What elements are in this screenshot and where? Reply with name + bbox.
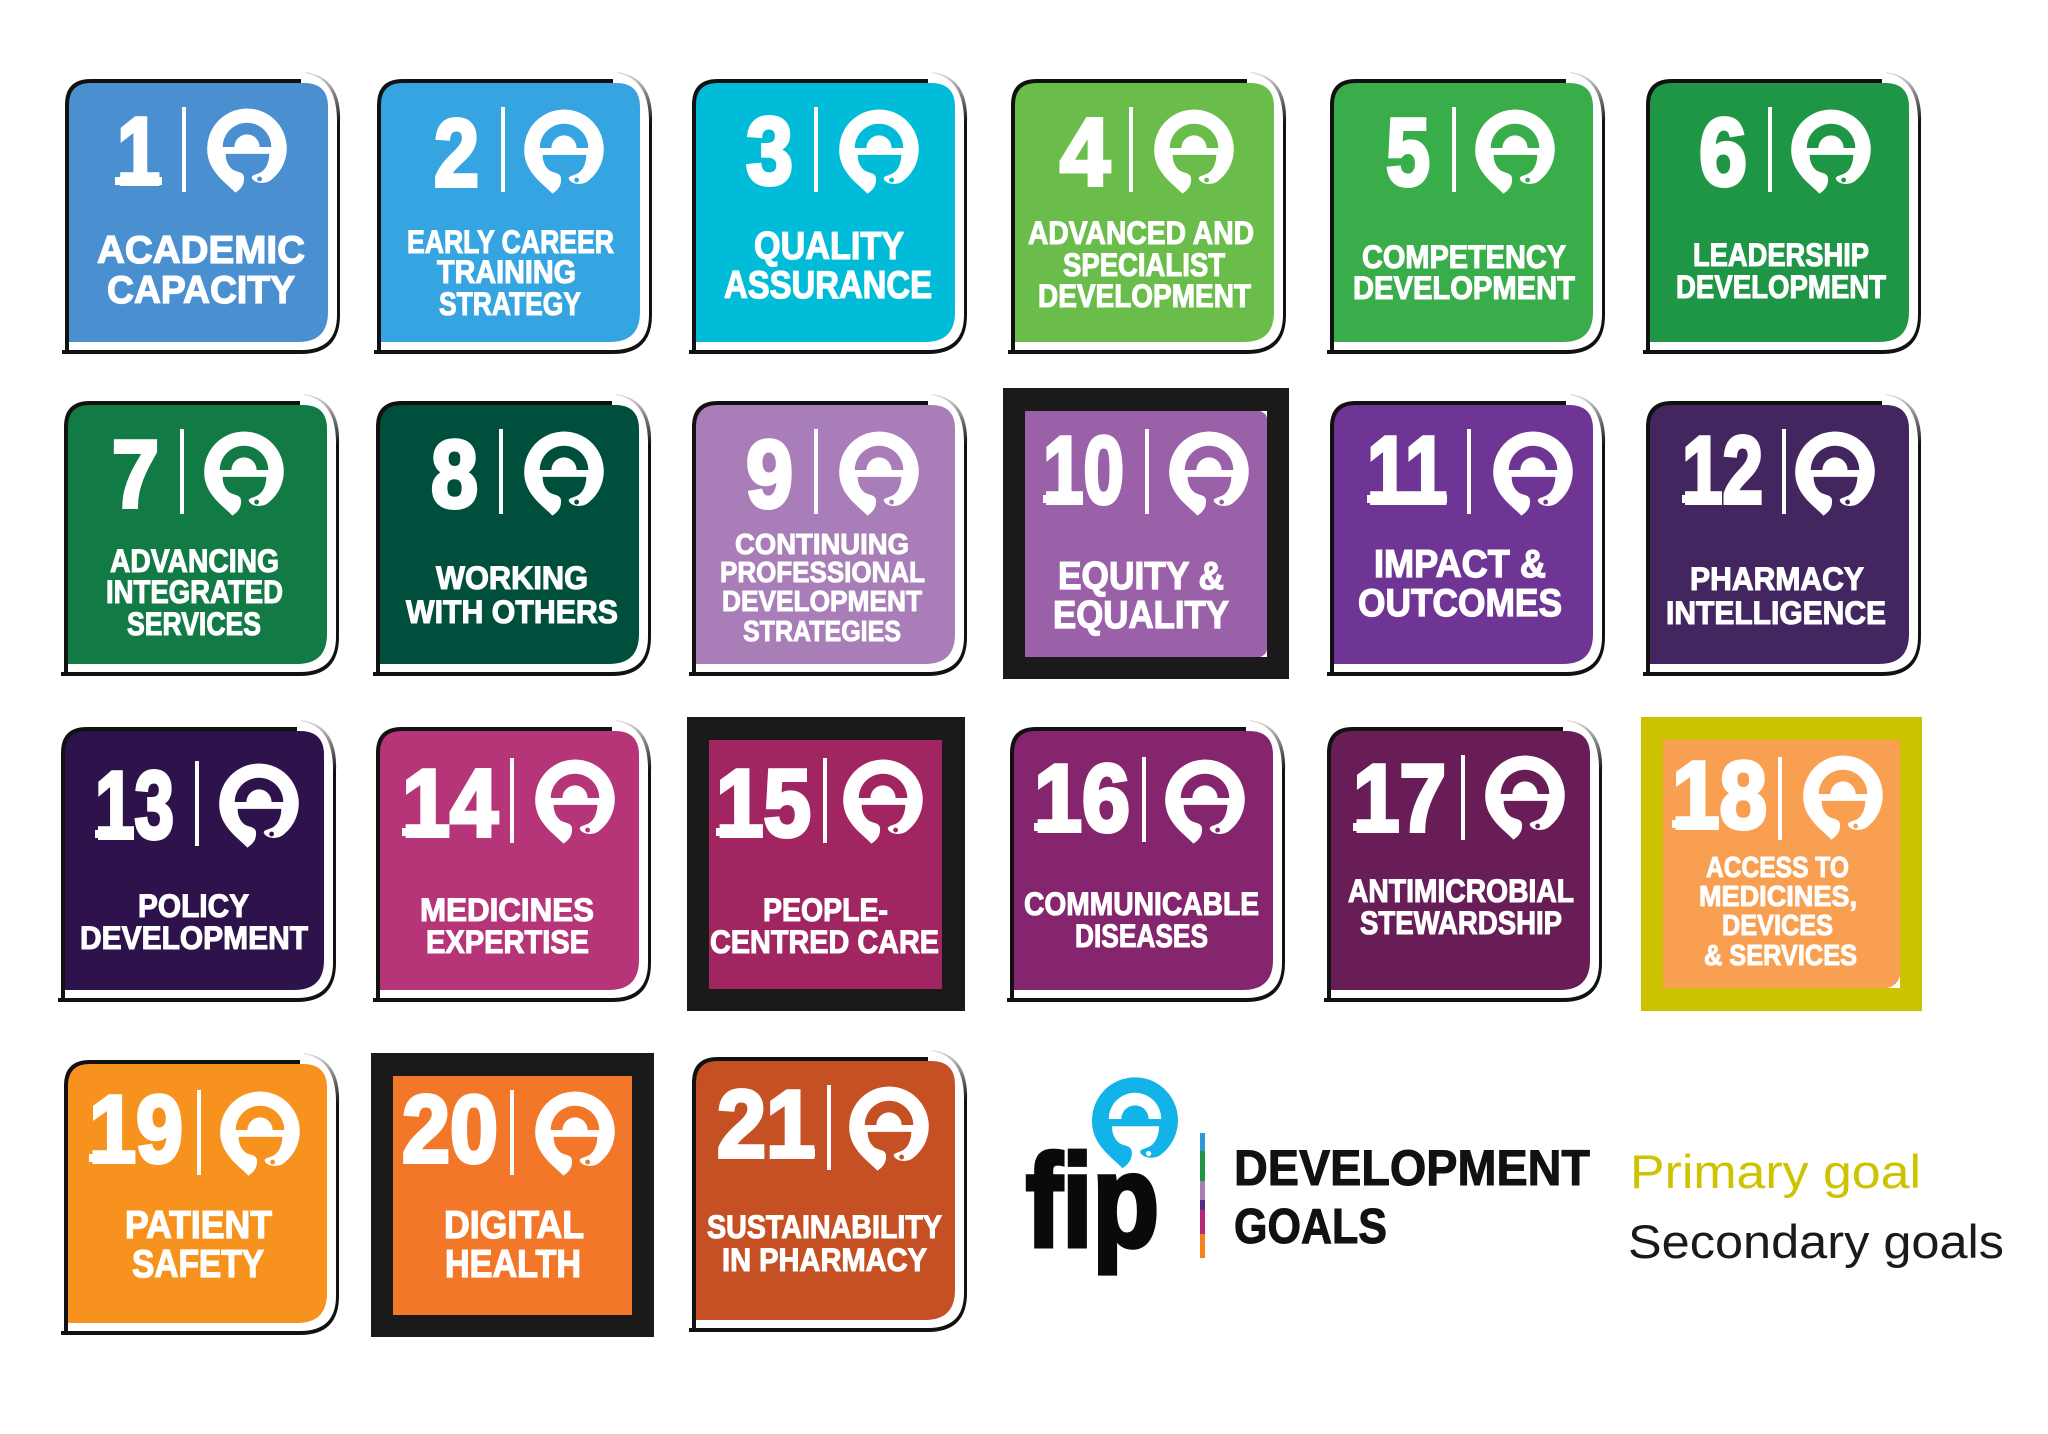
number 12: 12 xyxy=(1682,417,1763,524)
label xyxy=(1053,555,1229,637)
label xyxy=(1024,886,1259,954)
number 11: 11 xyxy=(1367,417,1447,524)
label: PATIENT xyxy=(125,1204,272,1247)
logo text xyxy=(1234,1140,1590,1254)
tile 2: early career training strategy xyxy=(374,72,652,354)
tile 16: communicable diseases xyxy=(1007,720,1285,1002)
number 7: 7 xyxy=(112,421,159,528)
icon: fip symbol xyxy=(524,432,604,516)
label xyxy=(80,888,308,956)
tile 9: continuing professional development strategies xyxy=(689,394,967,676)
label: INTELLIGENCE xyxy=(1666,595,1886,631)
number 1: 1 xyxy=(117,98,160,205)
legend: primary goal: Primary goal xyxy=(1630,1145,1921,1198)
icon: fip symbol xyxy=(839,432,919,516)
label: CENTRED CARE xyxy=(710,924,939,960)
label: CAPACITY xyxy=(107,269,295,312)
colour bar xyxy=(1200,1133,1205,1258)
label: DEVELOPMENT xyxy=(1353,270,1575,306)
icon: fip symbol xyxy=(1475,110,1555,194)
tile 12: pharmacy intelligence xyxy=(1643,394,1921,676)
number 13: 13 xyxy=(95,752,174,859)
label xyxy=(720,529,925,648)
label: SAFETY xyxy=(132,1243,264,1286)
icon: fip symbol xyxy=(1795,432,1875,516)
label: & SERVICES xyxy=(1704,940,1857,972)
label: STEWARDSHIP xyxy=(1360,905,1562,941)
number 17: 17 xyxy=(1353,745,1446,852)
tile 10: equity and equality (secondary goal) xyxy=(1003,388,1289,679)
tile 20: digital health (secondary goal) xyxy=(371,1053,654,1337)
label: IN PHARMACY xyxy=(722,1242,927,1278)
label: POLICY xyxy=(138,888,249,924)
number 8: 8 xyxy=(431,421,478,528)
tile 5: competency development xyxy=(1327,72,1605,354)
number 6: 6 xyxy=(1699,99,1747,206)
label: DEVELOPMENT xyxy=(80,920,308,956)
logo text: DEVELOPMENT xyxy=(1234,1140,1590,1196)
logo: fip development goals xyxy=(1026,1077,1590,1274)
label: MEDICINES xyxy=(420,892,594,928)
tile 4: advanced and specialist development xyxy=(1008,72,1286,354)
logo wordmark fip: fip xyxy=(1026,1127,1159,1274)
number 9: 9 xyxy=(746,421,793,528)
label: STRATEGY xyxy=(439,286,581,322)
tile 13: policy development xyxy=(58,720,336,1002)
label: EXPERTISE xyxy=(426,924,589,960)
legend: secondary goals: Secondary goals xyxy=(1628,1215,2004,1268)
label xyxy=(106,543,283,642)
icon: fip symbol xyxy=(843,760,923,844)
number 10: 10 xyxy=(1043,417,1124,524)
icon: fip symbol xyxy=(1165,760,1245,844)
label xyxy=(125,1204,272,1286)
label: EQUALITY xyxy=(1053,594,1229,637)
tile 19: patient safety xyxy=(61,1053,339,1335)
label: INTEGRATED xyxy=(106,574,283,610)
label: LEADERSHIP xyxy=(1693,237,1869,273)
tile 11: impact and outcomes xyxy=(1327,394,1605,676)
label xyxy=(1676,237,1886,305)
tile 3: quality assurance xyxy=(689,72,967,354)
label xyxy=(407,224,614,322)
label: CONTINUING xyxy=(735,529,909,561)
label xyxy=(1666,561,1886,631)
label: ASSURANCE xyxy=(724,264,932,307)
label xyxy=(710,892,939,960)
label xyxy=(724,225,932,307)
number 2: 2 xyxy=(434,100,479,207)
label: SERVICES xyxy=(127,606,261,642)
tile 18: access to medicines, devices and services (primary goal) xyxy=(1641,717,1922,1011)
label: DEVELOPMENT xyxy=(722,586,922,618)
icon: fip symbol xyxy=(1803,756,1883,840)
label: COMPETENCY xyxy=(1362,239,1566,275)
label: DEVELOPMENT xyxy=(1038,278,1251,314)
label xyxy=(406,560,618,630)
icon: fip symbol xyxy=(1791,110,1871,194)
label: STRATEGIES xyxy=(743,616,901,648)
label xyxy=(1358,543,1562,625)
label: MEDICINES, xyxy=(1699,881,1857,913)
label xyxy=(1028,215,1254,314)
tile 8: working with others xyxy=(373,394,651,676)
label xyxy=(420,892,594,960)
label: TRAINING xyxy=(437,254,576,290)
icon: fip symbol xyxy=(1485,756,1565,840)
label: OUTCOMES xyxy=(1358,582,1562,625)
label: SPECIALIST xyxy=(1063,247,1225,283)
label: IMPACT & xyxy=(1374,543,1546,586)
label: DISEASES xyxy=(1075,918,1208,954)
tile 21: sustainability in pharmacy xyxy=(689,1050,967,1332)
label: EARLY CAREER xyxy=(407,224,614,260)
icon: fip symbol xyxy=(1493,432,1573,516)
label: WORKING xyxy=(436,560,588,596)
label: ACADEMIC xyxy=(97,229,305,272)
label: DEVICES xyxy=(1722,910,1833,942)
label: COMMUNICABLE xyxy=(1024,886,1259,922)
number 3: 3 xyxy=(746,98,793,205)
tile 1: academic capacity xyxy=(62,72,340,354)
number 21: 21 xyxy=(717,1071,815,1178)
icon: fip symbol xyxy=(524,110,604,194)
label xyxy=(1348,873,1574,941)
icon: fip symbol xyxy=(849,1087,929,1171)
label xyxy=(97,229,305,312)
number 14: 14 xyxy=(402,750,498,857)
label: ACCESS TO xyxy=(1706,852,1849,884)
label: PEOPLE- xyxy=(763,892,888,928)
number 19: 19 xyxy=(89,1076,183,1183)
label: SUSTAINABILITY xyxy=(707,1209,942,1245)
label: DEVELOPMENT xyxy=(1676,269,1886,305)
label xyxy=(707,1209,942,1278)
number 18: 18 xyxy=(1672,742,1767,849)
label: PROFESSIONAL xyxy=(720,557,925,589)
icon: logo drop xyxy=(1092,1077,1178,1168)
logo text: GOALS xyxy=(1234,1200,1387,1254)
number 16: 16 xyxy=(1034,745,1130,852)
tile 6: leadership development xyxy=(1643,72,1921,354)
icon: fip symbol xyxy=(204,432,284,516)
legend xyxy=(1628,1145,2004,1268)
icon: fip symbol xyxy=(220,1092,300,1176)
icon: fip symbol xyxy=(207,109,287,193)
label: QUALITY xyxy=(754,225,904,268)
icon: fip symbol xyxy=(219,764,299,848)
tile 17: antimicrobial stewardship xyxy=(1324,720,1602,1002)
label: ANTIMICROBIAL xyxy=(1348,873,1574,909)
tile 14: medicines expertise xyxy=(373,720,651,1002)
label xyxy=(1699,852,1857,972)
label: ADVANCING xyxy=(110,543,279,579)
label: PHARMACY xyxy=(1690,561,1864,597)
icon: fip symbol xyxy=(1169,432,1249,516)
label: EQUITY & xyxy=(1058,555,1224,598)
icon: fip symbol xyxy=(1154,110,1234,194)
label: WITH OTHERS xyxy=(406,594,618,630)
label: ADVANCED AND xyxy=(1028,215,1254,251)
icon: fip symbol xyxy=(535,1092,615,1176)
number 4: 4 xyxy=(1060,99,1110,206)
number 15: 15 xyxy=(716,750,811,857)
number 20: 20 xyxy=(402,1076,498,1183)
icon: fip symbol xyxy=(839,110,919,194)
tile 15: people-centred care (secondary goal) xyxy=(687,717,965,1011)
label xyxy=(1353,239,1575,306)
icon: fip symbol xyxy=(535,760,615,844)
label xyxy=(444,1204,584,1286)
label: DIGITAL xyxy=(444,1204,584,1247)
label: HEALTH xyxy=(445,1243,581,1286)
number 5: 5 xyxy=(1386,99,1430,206)
tile 7: advancing integrated services xyxy=(61,394,339,676)
